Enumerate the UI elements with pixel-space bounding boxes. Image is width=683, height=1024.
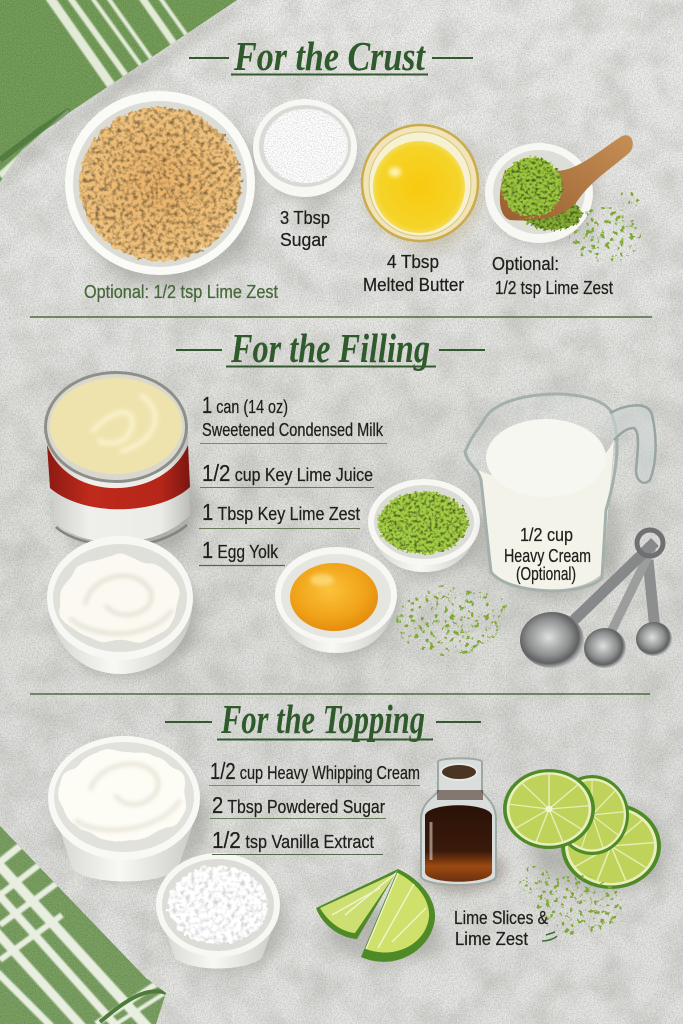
heading: For the Crust: For the Crust	[233, 33, 426, 79]
icon: bowl of graham crumbs	[65, 91, 262, 286]
item: sweetened condensed milk: 1 can (14 oz)	[202, 392, 288, 418]
icon: measuring spoons	[520, 530, 672, 668]
heading: For the Topping: For the Topping	[220, 696, 425, 742]
panel: filling	[44, 325, 672, 678]
scatter: lime zest	[519, 866, 622, 935]
towel: bottom-left plaid	[0, 820, 170, 1024]
heading: For the Filling: For the Filling	[230, 325, 430, 371]
item: sweetened condensed milk: Sweetened Condensed Milk	[202, 420, 384, 440]
icon: ramekin of powdered sugar	[156, 853, 288, 972]
divider: crust and filling	[30, 316, 652, 318]
towel: top-left green striped	[0, 0, 240, 190]
panel: topping	[0, 696, 670, 1024]
label: optional lime zest right: Optional:	[492, 254, 559, 274]
icon: bowl with egg yolk	[275, 547, 400, 656]
label: 4 Tbsp Melted Butter: Melted Butter	[363, 275, 464, 295]
ingredient list: filling	[199, 392, 387, 566]
item: key lime juice: 1/2 cup Key Lime Juice	[202, 460, 373, 486]
icon: bowl of cream cheese	[47, 536, 200, 678]
label: 1/2 cup heavy cream optional: (Optional)	[516, 564, 576, 584]
icon: glass bowl of melted butter	[362, 125, 482, 246]
label: optional lime zest right: 1/2 tsp Lime Zest	[495, 278, 613, 298]
icon: ramekin of whipped cream	[48, 736, 208, 882]
label: 1/2 cup heavy cream optional: Heavy Cream	[504, 546, 591, 566]
icon: bowl of lime zest with wooden spoon	[485, 135, 633, 246]
label: 3 Tbsp Sugar	[280, 208, 330, 250]
icon: lime wedges	[316, 869, 443, 963]
icon: bowl of sugar	[253, 99, 362, 202]
label: lime slices and lime zest	[454, 908, 557, 949]
label: lime slices and lime zest: Lime Slices &	[454, 908, 548, 928]
icon: bowl of lime zest	[368, 479, 484, 575]
label: 3 Tbsp Sugar: 3 Tbsp	[280, 208, 330, 228]
label: optional lime zest right	[492, 254, 613, 298]
icon: lime slices	[503, 769, 670, 894]
label: 4 Tbsp Melted Butter	[363, 252, 464, 295]
label: 4 Tbsp Melted Butter: 4 Tbsp	[387, 252, 439, 272]
label: optional lime zest green: Optional: 1/2 tsp Lime Zest	[84, 282, 278, 302]
item: powdered sugar: 2 Tbsp Powdered Sugar	[212, 792, 385, 818]
scatter: lime zest	[396, 585, 508, 656]
label: 1/2 cup heavy cream optional	[504, 525, 591, 584]
label: lime slices and lime zest: Lime Zest	[455, 929, 528, 949]
item: heavy whipping cream: 1/2 cup Heavy Whipping Cream	[210, 758, 420, 784]
panel: crust	[65, 33, 641, 302]
icon: can of sweetened condensed milk	[44, 371, 202, 555]
label: 1/2 cup heavy cream optional: 1/2 cup	[520, 525, 573, 545]
label: 3 Tbsp Sugar: Sugar	[280, 230, 327, 250]
item: key lime zest: 1 Tbsp Key Lime Zest	[202, 499, 360, 525]
icon: vanilla extract bottle	[420, 758, 504, 892]
item: egg yolk: 1 Egg Yolk	[202, 537, 279, 563]
item: vanilla extract: 1/2 tsp Vanilla Extract	[212, 827, 374, 853]
ingredient list: topping	[209, 758, 420, 854]
scatter: lime zest	[569, 188, 641, 263]
item: sweetened condensed milk	[200, 392, 387, 444]
icon: glass measuring jug of heavy cream	[465, 394, 656, 600]
divider: filling and topping	[30, 693, 650, 695]
